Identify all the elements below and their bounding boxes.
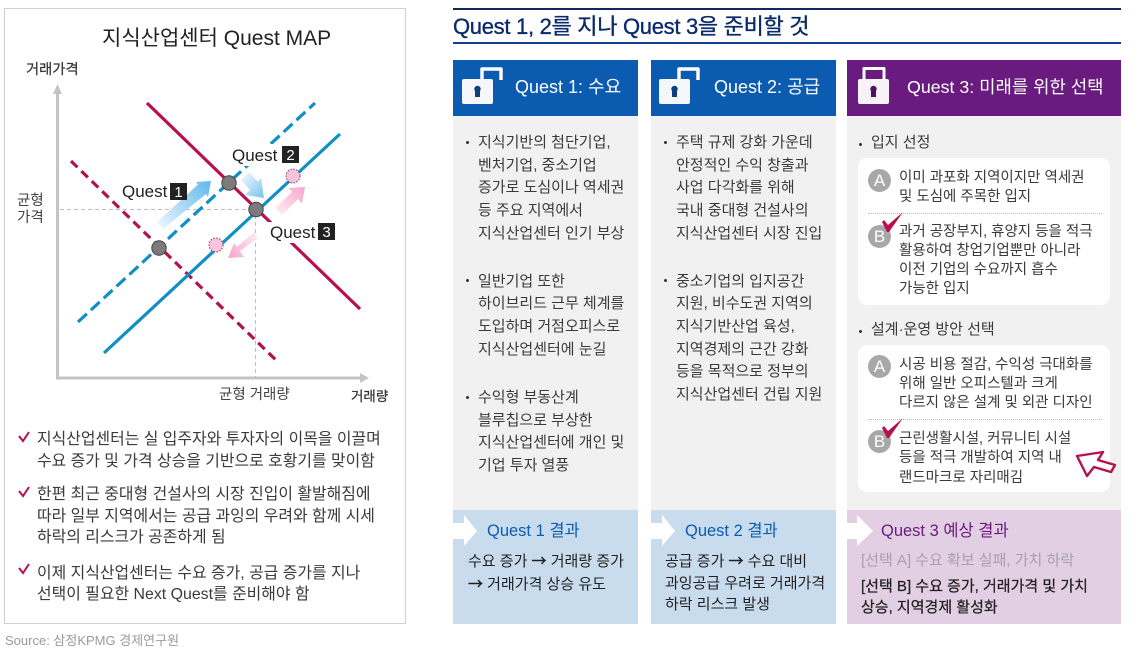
bullets: quest 1: 일반기업 또한 xyxy=(478,272,565,290)
option B xyxy=(868,225,891,248)
bullets: quest 1: 등 주요 지역에서 xyxy=(478,202,583,219)
result title: Quest 1 결과 xyxy=(487,522,580,540)
result title: Quest 3 예상 결과 xyxy=(881,522,1009,540)
map title: 지식산업센터 Quest MAP xyxy=(102,27,331,50)
text block: bullet 3: 이제 지식산업센터는 수요 증가, 공급 증가를 지나 xyxy=(37,564,360,582)
label: quest 1: Quest xyxy=(122,182,168,201)
check marks xyxy=(18,432,30,575)
icon: open lock xyxy=(659,67,700,104)
demand line dashed xyxy=(71,161,279,363)
axis label: equilibrium price: 균형 xyxy=(17,192,44,209)
option A xyxy=(868,355,891,378)
axes xyxy=(53,84,369,383)
card: location options: 활용하여 창업기업뿐만 아니라 xyxy=(899,242,1080,258)
option B: B xyxy=(874,432,885,451)
bullets: quest 1: 도입하며 거점오피스로 xyxy=(478,318,620,335)
bullets: quest 1: 기업 투자 열풍 xyxy=(478,457,569,474)
text block: bullet 2: 하락의 리스크가 공존하게 됨 xyxy=(37,529,226,546)
label: quest 2: 2 xyxy=(286,147,295,164)
bullets: quest 2: 지식산업센터 건립 지원 xyxy=(676,386,822,403)
equilibrium guide lines xyxy=(60,210,256,377)
bullets: quest 2: 주택 규제 강화 가운데 xyxy=(676,134,813,151)
label: quest 2 xyxy=(230,144,302,166)
panel: quest 1 xyxy=(453,60,638,624)
supply line solid xyxy=(104,134,340,353)
card: design options: 등을 적극 개발하여 지역 내 xyxy=(899,450,1062,466)
bullets: quest 1: 지식산업센터에 개인 및 xyxy=(478,434,624,451)
supply line dashed xyxy=(78,103,315,322)
scenario points xyxy=(209,169,300,252)
result: quest 1 xyxy=(453,510,638,624)
text block: bullet 2: 한편 최근 중대형 건설사의 시장 진입이 활발해짐에 xyxy=(37,486,370,503)
result text xyxy=(665,550,825,613)
panel: quest 2 xyxy=(651,60,836,624)
header title: Quest 1: 수요 xyxy=(515,77,621,97)
header title: Quest 3: 미래를 위한 선택 xyxy=(907,77,1104,97)
equilibrium points xyxy=(152,176,263,255)
option B: B xyxy=(874,227,885,246)
bullets: quest 1: 지식산업센터 인기 부상 xyxy=(478,225,624,242)
icon: closed lock xyxy=(858,67,889,104)
panel: Quest MAP xyxy=(4,8,406,624)
result: quest 3 xyxy=(847,510,1121,624)
panel: quest 3 xyxy=(847,60,1121,624)
bullets: quest 2: 국내 중대형 건설사의 xyxy=(676,202,809,219)
header title: Quest 2: 공급 xyxy=(714,77,820,97)
result text: 하락 리스크 발생 xyxy=(665,596,770,613)
card: design options: 시공 비용 절감, 수익성 극대화를 xyxy=(899,356,1093,372)
text block: bullet 2 xyxy=(37,485,375,546)
card: location options: 가능한 입지 xyxy=(899,280,970,296)
bullets: quest 1: 블루칩으로 부상한 xyxy=(478,412,593,429)
label: quest 2: Quest xyxy=(232,146,278,165)
icon: pointer arrow xyxy=(1076,450,1116,478)
result text: option B xyxy=(861,578,1088,616)
bullets: quest 2: 안정적인 수익 창출과 xyxy=(676,157,809,174)
icon: check xyxy=(882,418,903,438)
subheading: design: 설계·운영 방안 선택 xyxy=(871,320,995,338)
result text: → 거래가격 상승 유도 xyxy=(468,572,606,594)
bullets: quest 2: 등을 목적으로 정부의 xyxy=(676,363,809,380)
label: quest 1 xyxy=(122,182,187,201)
text block: bullet 3 xyxy=(37,564,360,603)
icon: check xyxy=(882,212,903,232)
header: quest 3 xyxy=(847,60,1121,116)
axis label: equilibrium volume: 균형 거래량 xyxy=(219,386,290,403)
result text: option A: [선택 A] 수요 확보 실패, 가치 하락 xyxy=(861,552,1074,569)
arrow xyxy=(453,515,477,546)
demand line solid xyxy=(147,103,360,309)
text block: bullet 1: 수요 증가 및 가격 상승을 기반으로 호황기를 맞이함 xyxy=(37,452,375,470)
axis label: price: 거래가격 xyxy=(26,61,79,78)
axis label: equilibrium price xyxy=(17,192,44,226)
heading: Quest 1, 2를 지나 Quest 3을 준비할 것 xyxy=(453,14,809,39)
axis label: equilibrium price: 가격 xyxy=(17,209,44,226)
bullets: quest 2: 사업 다각화를 위해 xyxy=(676,179,795,196)
bullets: quest 2: 지역경제의 근간 강화 xyxy=(676,341,809,358)
bullets: quest 1: 벤처기업, 중소기업 xyxy=(478,157,597,174)
card: design options: 위해 일반 오피스텔과 크게 xyxy=(899,376,1058,392)
result text: option B: 상승, 지역경제 활성화 xyxy=(861,598,998,616)
subheading: location: 입지 선정 xyxy=(871,134,930,151)
arrow: quest 3 down xyxy=(228,232,258,258)
text block: bullet 1 xyxy=(37,430,381,470)
bullets: quest 2: 중소기업의 입지공간 xyxy=(676,272,804,290)
label: quest 3 xyxy=(268,222,338,243)
bullets: quest 1: 수익형 부동산계 xyxy=(478,389,579,406)
bullets: quest 1: 하이브리드 근무 체계를 xyxy=(478,295,624,312)
icon: open lock xyxy=(462,67,503,104)
text block: bullet 3: 선택이 필요한 Next Quest를 준비해야 함 xyxy=(37,586,310,603)
bullets: quest 2: 지식기반산업 육성, xyxy=(676,318,795,335)
heading xyxy=(453,8,1121,44)
source: Source: 삼정KPMG 경제연구원 xyxy=(5,633,179,648)
option A: A xyxy=(874,171,885,190)
result title: Quest 2 결과 xyxy=(685,522,778,540)
card: design options: 다르지 않은 설계 및 외관 디자인 xyxy=(899,394,1093,410)
arrow xyxy=(651,515,675,546)
text block: bullet 2: 따라 일부 지역에서는 공급 과잉의 우려와 함께 시세 xyxy=(37,508,375,524)
header: quest 2 xyxy=(651,60,836,116)
header: quest 1 xyxy=(453,60,638,116)
arrow: quest 2 xyxy=(241,172,264,198)
arrow: quest 1 xyxy=(157,181,211,229)
result: quest 2 xyxy=(651,510,836,624)
result text xyxy=(468,550,624,594)
result text: 과잉공급 우려로 거래가격 xyxy=(665,574,825,592)
card: location options xyxy=(858,158,1110,305)
bullets: quest 1: 증가로 도심이나 역세권 xyxy=(478,179,624,196)
bullets: quest 1: 지식산업센터에 눈길 xyxy=(478,341,606,358)
card: location options: 이전 기업의 수요까지 흡수 xyxy=(899,262,1058,278)
label: quest 3: 3 xyxy=(322,224,331,241)
text block: bullet 1: 지식산업센터는 실 입주자와 투자자의 이목을 이끌며 xyxy=(37,431,381,448)
card: design options: 랜드마크로 자리매김 xyxy=(899,470,1023,486)
result text: 공급 증가 → 수요 대비 xyxy=(665,550,807,571)
label: quest 3: Quest xyxy=(270,223,316,242)
result text: option B: [선택 B] 수요 증가, 거래가격 및 가치 xyxy=(861,578,1088,594)
result text: 수요 증가 → 거래량 증가 xyxy=(468,550,624,571)
bullets: quest 2: 지원, 비수도권 지역의 xyxy=(676,295,813,312)
arrow: quest 3 up xyxy=(275,187,305,215)
label: quest 1: 1 xyxy=(174,184,183,201)
bullets: quest 2: 지식산업센터 시장 진입 xyxy=(676,225,822,242)
chart: supply and demand quest map xyxy=(17,61,388,404)
card: design options: 근린생활시설, 커뮤니티 시설 xyxy=(899,430,1071,446)
option A: A xyxy=(874,357,885,376)
option B xyxy=(868,430,891,453)
axis label: volume: 거래량 xyxy=(351,389,388,404)
bullets: quest 1: 지식기반의 첨단기업, xyxy=(478,134,611,151)
card: location options: 과거 공장부지, 휴양지 등을 적극 xyxy=(899,224,1093,240)
arrow xyxy=(847,515,873,546)
card: design options xyxy=(858,345,1110,492)
option A xyxy=(868,169,891,192)
card: location options: 및 도심에 주목한 입지 xyxy=(899,189,1031,205)
card: location options: 이미 과포화 지역이지만 역세권 xyxy=(899,170,1085,186)
bullets: quest 2 xyxy=(664,134,822,403)
bullets: quest 1 xyxy=(466,134,624,474)
